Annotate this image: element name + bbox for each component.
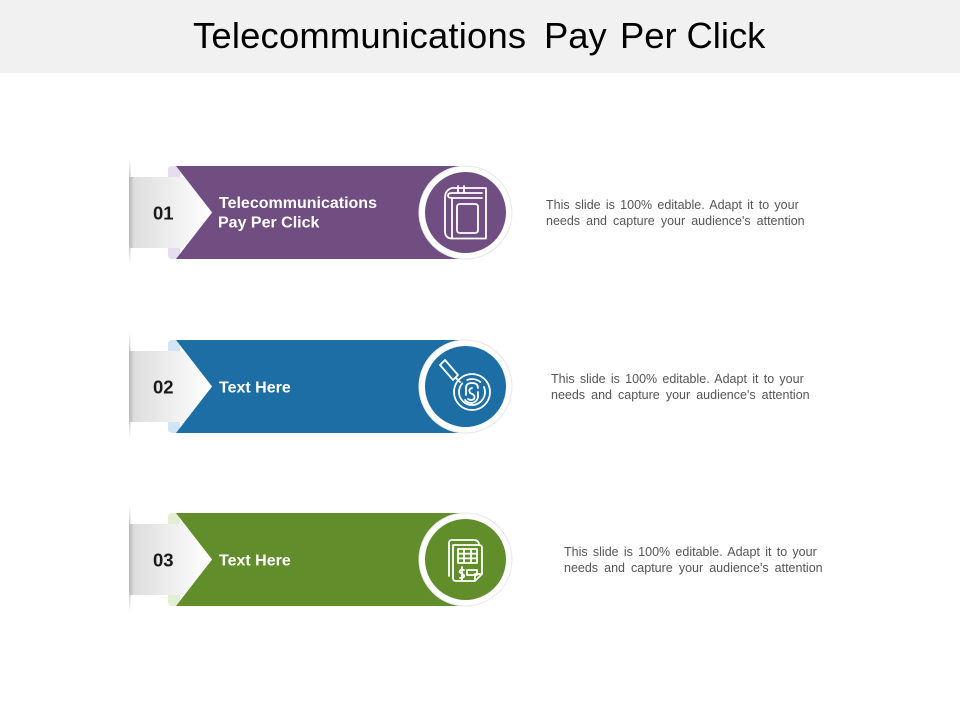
icon: magnifier with fingerprint — [419, 340, 512, 433]
number tab — [130, 351, 212, 422]
title: Pay — [544, 15, 608, 56]
description: needs and capture your audience's attention — [564, 561, 823, 575]
description: needs and capture your audience's attention — [546, 214, 805, 228]
number tab — [130, 524, 212, 595]
label: Text Here — [219, 380, 291, 396]
band — [176, 340, 465, 433]
description: This slide is 100% editable. Adapt it to your — [551, 372, 804, 386]
band — [176, 166, 465, 259]
icon: book — [419, 166, 512, 259]
number tab — [130, 177, 212, 248]
title: Telecommunications — [193, 15, 526, 56]
description: This slide is 100% editable. Adapt it to your — [564, 545, 817, 559]
band — [176, 513, 465, 606]
panel: item 01 — [129, 158, 805, 265]
icon: financial document — [419, 513, 512, 606]
title: Per — [620, 15, 677, 56]
label: Text Here — [219, 552, 291, 570]
description: This slide is 100% editable. Adapt it to your — [546, 198, 799, 212]
number tab: 03 — [153, 550, 174, 570]
description — [551, 372, 810, 402]
panel: item 02 — [129, 332, 810, 439]
label: Telecommunications — [219, 195, 377, 212]
description: needs and capture your audience's attention — [551, 388, 810, 402]
number tab: 01 — [153, 202, 174, 224]
title: Click — [686, 15, 766, 56]
title bar — [0, 0, 960, 73]
description — [546, 198, 805, 228]
number tab: 02 — [153, 376, 174, 398]
description — [564, 545, 823, 575]
label — [218, 195, 377, 232]
panel: item 03 — [129, 505, 823, 612]
label: Pay Per Click — [218, 214, 320, 232]
